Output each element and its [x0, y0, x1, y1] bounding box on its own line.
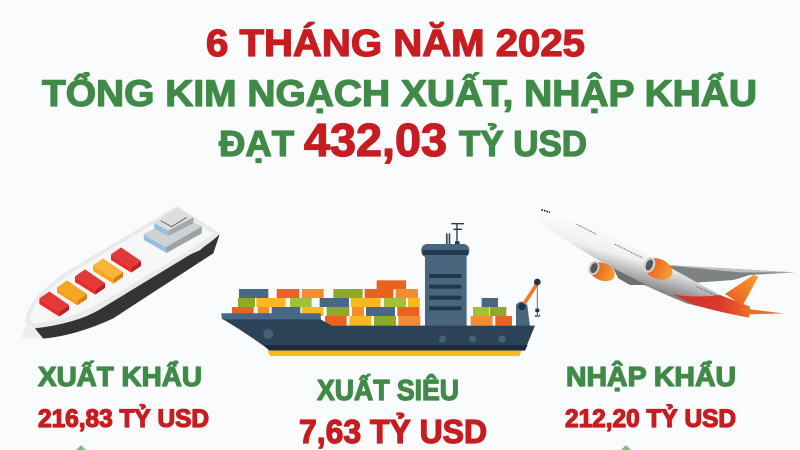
panel: exports — [38, 361, 209, 450]
icon: airplane — [533, 209, 795, 318]
title line 1: 6 THÁNG NĂM 2025 — [206, 21, 585, 65]
exports heading: XUẤT KHẨU — [38, 361, 202, 392]
icon: green up arrow — [76, 445, 86, 450]
far wing — [635, 263, 795, 283]
title — [42, 21, 757, 166]
icon: green up arrow — [621, 445, 631, 450]
hull — [221, 313, 535, 350]
icon: cargo ship (trade surplus) — [221, 224, 541, 356]
near wing — [613, 268, 647, 285]
fuselage — [533, 209, 750, 318]
crane — [516, 302, 530, 327]
tower — [425, 257, 467, 327]
icon: export ship — [22, 206, 221, 339]
panel: trade surplus — [299, 373, 487, 450]
imports heading: NHẬP KHẨU — [566, 361, 736, 392]
imports value: 212,20 TỶ USD — [565, 403, 736, 433]
near engine — [641, 254, 676, 284]
panel: imports — [565, 361, 736, 450]
total value: 432,03 — [304, 114, 447, 166]
far engine — [586, 259, 618, 285]
surplus value: 7,63 TỶ USD — [299, 413, 487, 450]
title line 3 unit: TỶ USD — [459, 123, 587, 164]
surplus heading: XUẤT SIÊU — [317, 373, 459, 407]
title line 3 label: ĐẠT — [219, 123, 294, 164]
tail fin — [725, 275, 758, 306]
title line 2: TỔNG KIM NGẠCH XUẤT, NHẬP KHẨU — [42, 71, 757, 114]
windows — [577, 224, 717, 296]
containers — [39, 247, 141, 317]
containers — [232, 280, 512, 326]
exports value: 216,83 TỶ USD — [38, 403, 209, 433]
